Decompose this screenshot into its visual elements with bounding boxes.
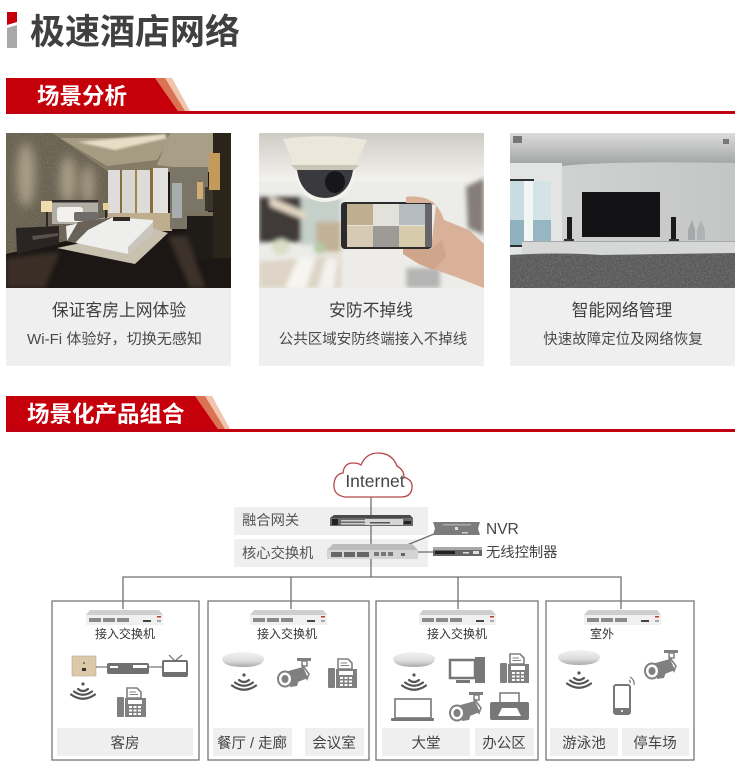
icon: ceiling AP [393, 652, 435, 667]
title: 极速酒店网络 [30, 13, 240, 52]
icon: camera [645, 650, 678, 679]
zone label: 大堂: 大堂 [412, 735, 440, 752]
access switch [250, 610, 327, 625]
zone label: 大堂 [382, 728, 470, 756]
icon: smartphone [614, 677, 634, 714]
zone label: 餐厅 / 走廊: 餐厅 / 走廊 [217, 735, 287, 752]
zone label: 客房: 客房 [110, 735, 140, 752]
icon: wifi [71, 682, 95, 699]
panel: 大堂, 办公区 [376, 601, 538, 760]
zone label: 办公区: 办公区 [482, 735, 526, 752]
icon: laptop [391, 699, 434, 721]
icon: ceiling AP [558, 650, 600, 665]
zone label: 餐厅 / 走廊 [213, 728, 292, 756]
device: core switch [327, 544, 418, 559]
cloud: Internet [334, 453, 412, 497]
zone label: 停车场: 停车场 [633, 735, 677, 752]
device: gateway [330, 515, 413, 526]
icon: wifi [232, 673, 256, 690]
section header: 场景化产品组合 [6, 396, 735, 432]
section header: 场景化产品组合: 场景化产品组合 [27, 402, 185, 427]
device: wireless controller [433, 547, 482, 556]
icon: wifi [567, 671, 591, 688]
icon: wall AP, set-top box, TV [72, 655, 187, 676]
card heading: 智能网络管理 [572, 301, 673, 320]
panel: 室外 [546, 601, 694, 760]
icon: desktop PC [450, 657, 485, 683]
icon: camera [278, 658, 311, 687]
icon: fax [117, 688, 146, 717]
icon: ceiling AP [222, 652, 264, 667]
card heading: 安防不掉线 [329, 301, 413, 320]
zone label: 会议室 [305, 728, 364, 756]
cloud: Internet: Internet [345, 471, 405, 491]
label: NVR: NVR [486, 521, 519, 538]
title accent bar [7, 12, 17, 48]
card description: 公共区域安防终端接入不掉线 [279, 331, 467, 348]
zone label: 会议室: 会议室 [312, 735, 356, 752]
zone label: 游泳池 [550, 728, 618, 756]
access switch [584, 610, 661, 625]
core row backgrounds [234, 507, 428, 567]
device: NVR [433, 522, 480, 535]
zone label: 办公区 [475, 728, 534, 756]
panel: 安防不掉线 [259, 133, 484, 366]
label: 融合网关: 融合网关 [242, 512, 299, 529]
label: 室外: 室外 [590, 626, 614, 641]
icon: printer [490, 693, 529, 720]
connection lines [123, 497, 621, 609]
card description: Wi-Fi 体验好，切换无感知 [27, 331, 202, 348]
label: 无线控制器: 无线控制器 [486, 544, 557, 561]
label: 接入交换机: 接入交换机 [257, 626, 317, 641]
zone label: 游泳池: 游泳池 [562, 735, 606, 752]
icon: camera [450, 692, 483, 721]
access switch [419, 610, 496, 625]
photo: hotel bedroom [6, 133, 231, 288]
panel: 智能网络管理 [510, 133, 735, 366]
label: 接入交换机: 接入交换机 [427, 626, 487, 641]
photo: dome camera and phone [259, 133, 484, 288]
icon: fax [328, 659, 357, 688]
panel: 客房 [52, 601, 199, 760]
card description: 快速故障定位及网络恢复 [543, 330, 703, 348]
section header: 场景分析 [6, 78, 735, 114]
card heading: 保证客房上网体验 [52, 301, 186, 320]
network diagram [52, 453, 694, 760]
label: 接入交换机: 接入交换机 [95, 626, 155, 641]
icon: fax [500, 654, 529, 683]
access switch [86, 610, 163, 625]
panel: 保证客房上网体验 [6, 133, 231, 366]
section header: 场景分析: 场景分析 [37, 84, 127, 109]
zone label: 停车场 [622, 728, 689, 756]
photo: living room with TV [510, 133, 735, 288]
label: 核心交换机: 核心交换机 [242, 544, 313, 562]
panel: 餐厅 / 走廊, 会议室 [208, 601, 369, 760]
icon: wifi [402, 673, 426, 690]
zone label: 客房 [57, 728, 193, 756]
